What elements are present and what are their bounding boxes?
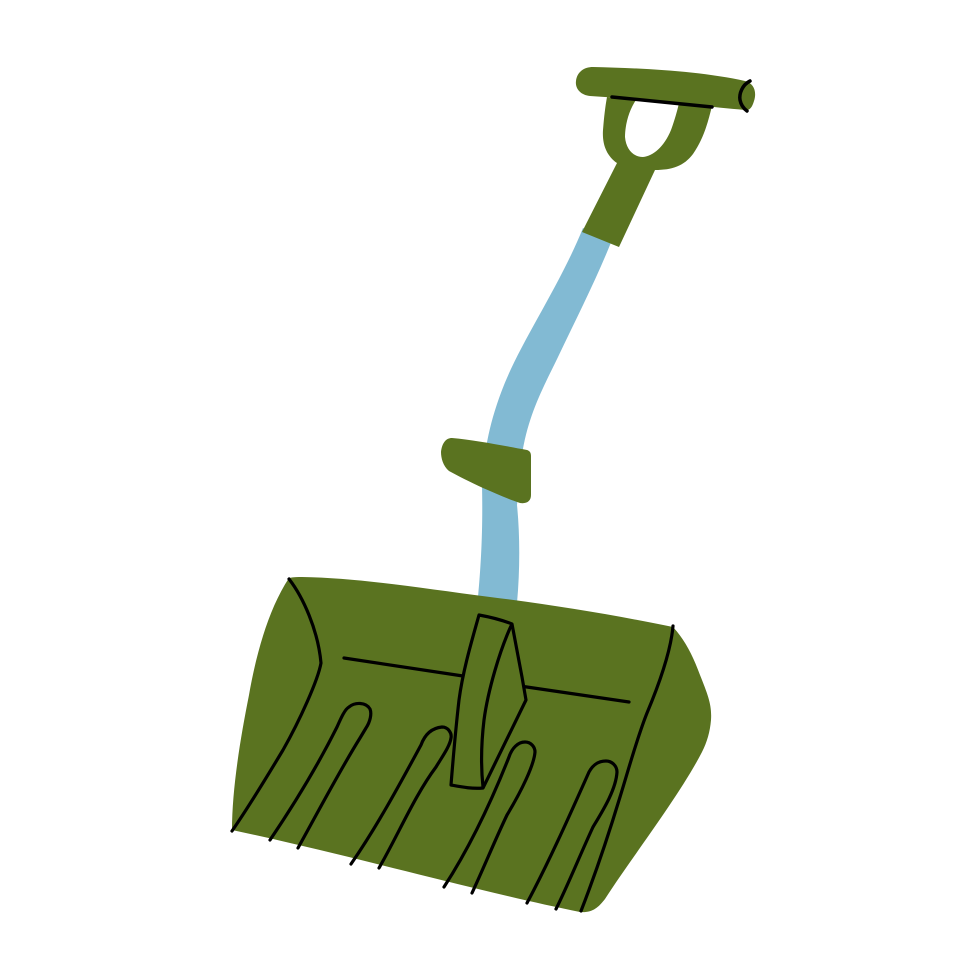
right side fold: [581, 626, 673, 911]
cross rib right: [520, 686, 629, 702]
grip: T handle: [576, 67, 755, 247]
finger rib 1: [270, 703, 371, 848]
grip bar: [576, 67, 755, 110]
collar: handle clamp: [441, 438, 531, 503]
blade center brace: [451, 615, 526, 788]
finger rib 4: [527, 761, 617, 909]
grip end cap line: [740, 81, 750, 111]
finger rib 3: [444, 742, 535, 893]
finger rib 2: [351, 727, 451, 868]
grip underside line: [612, 97, 712, 107]
cross rib left: [344, 658, 463, 676]
grip fork and socket: [582, 97, 712, 247]
blade lines: [232, 579, 673, 911]
left side fold: [232, 579, 321, 831]
blade: shovel scoop: [232, 577, 711, 912]
shaft: blue handle: [478, 228, 612, 603]
